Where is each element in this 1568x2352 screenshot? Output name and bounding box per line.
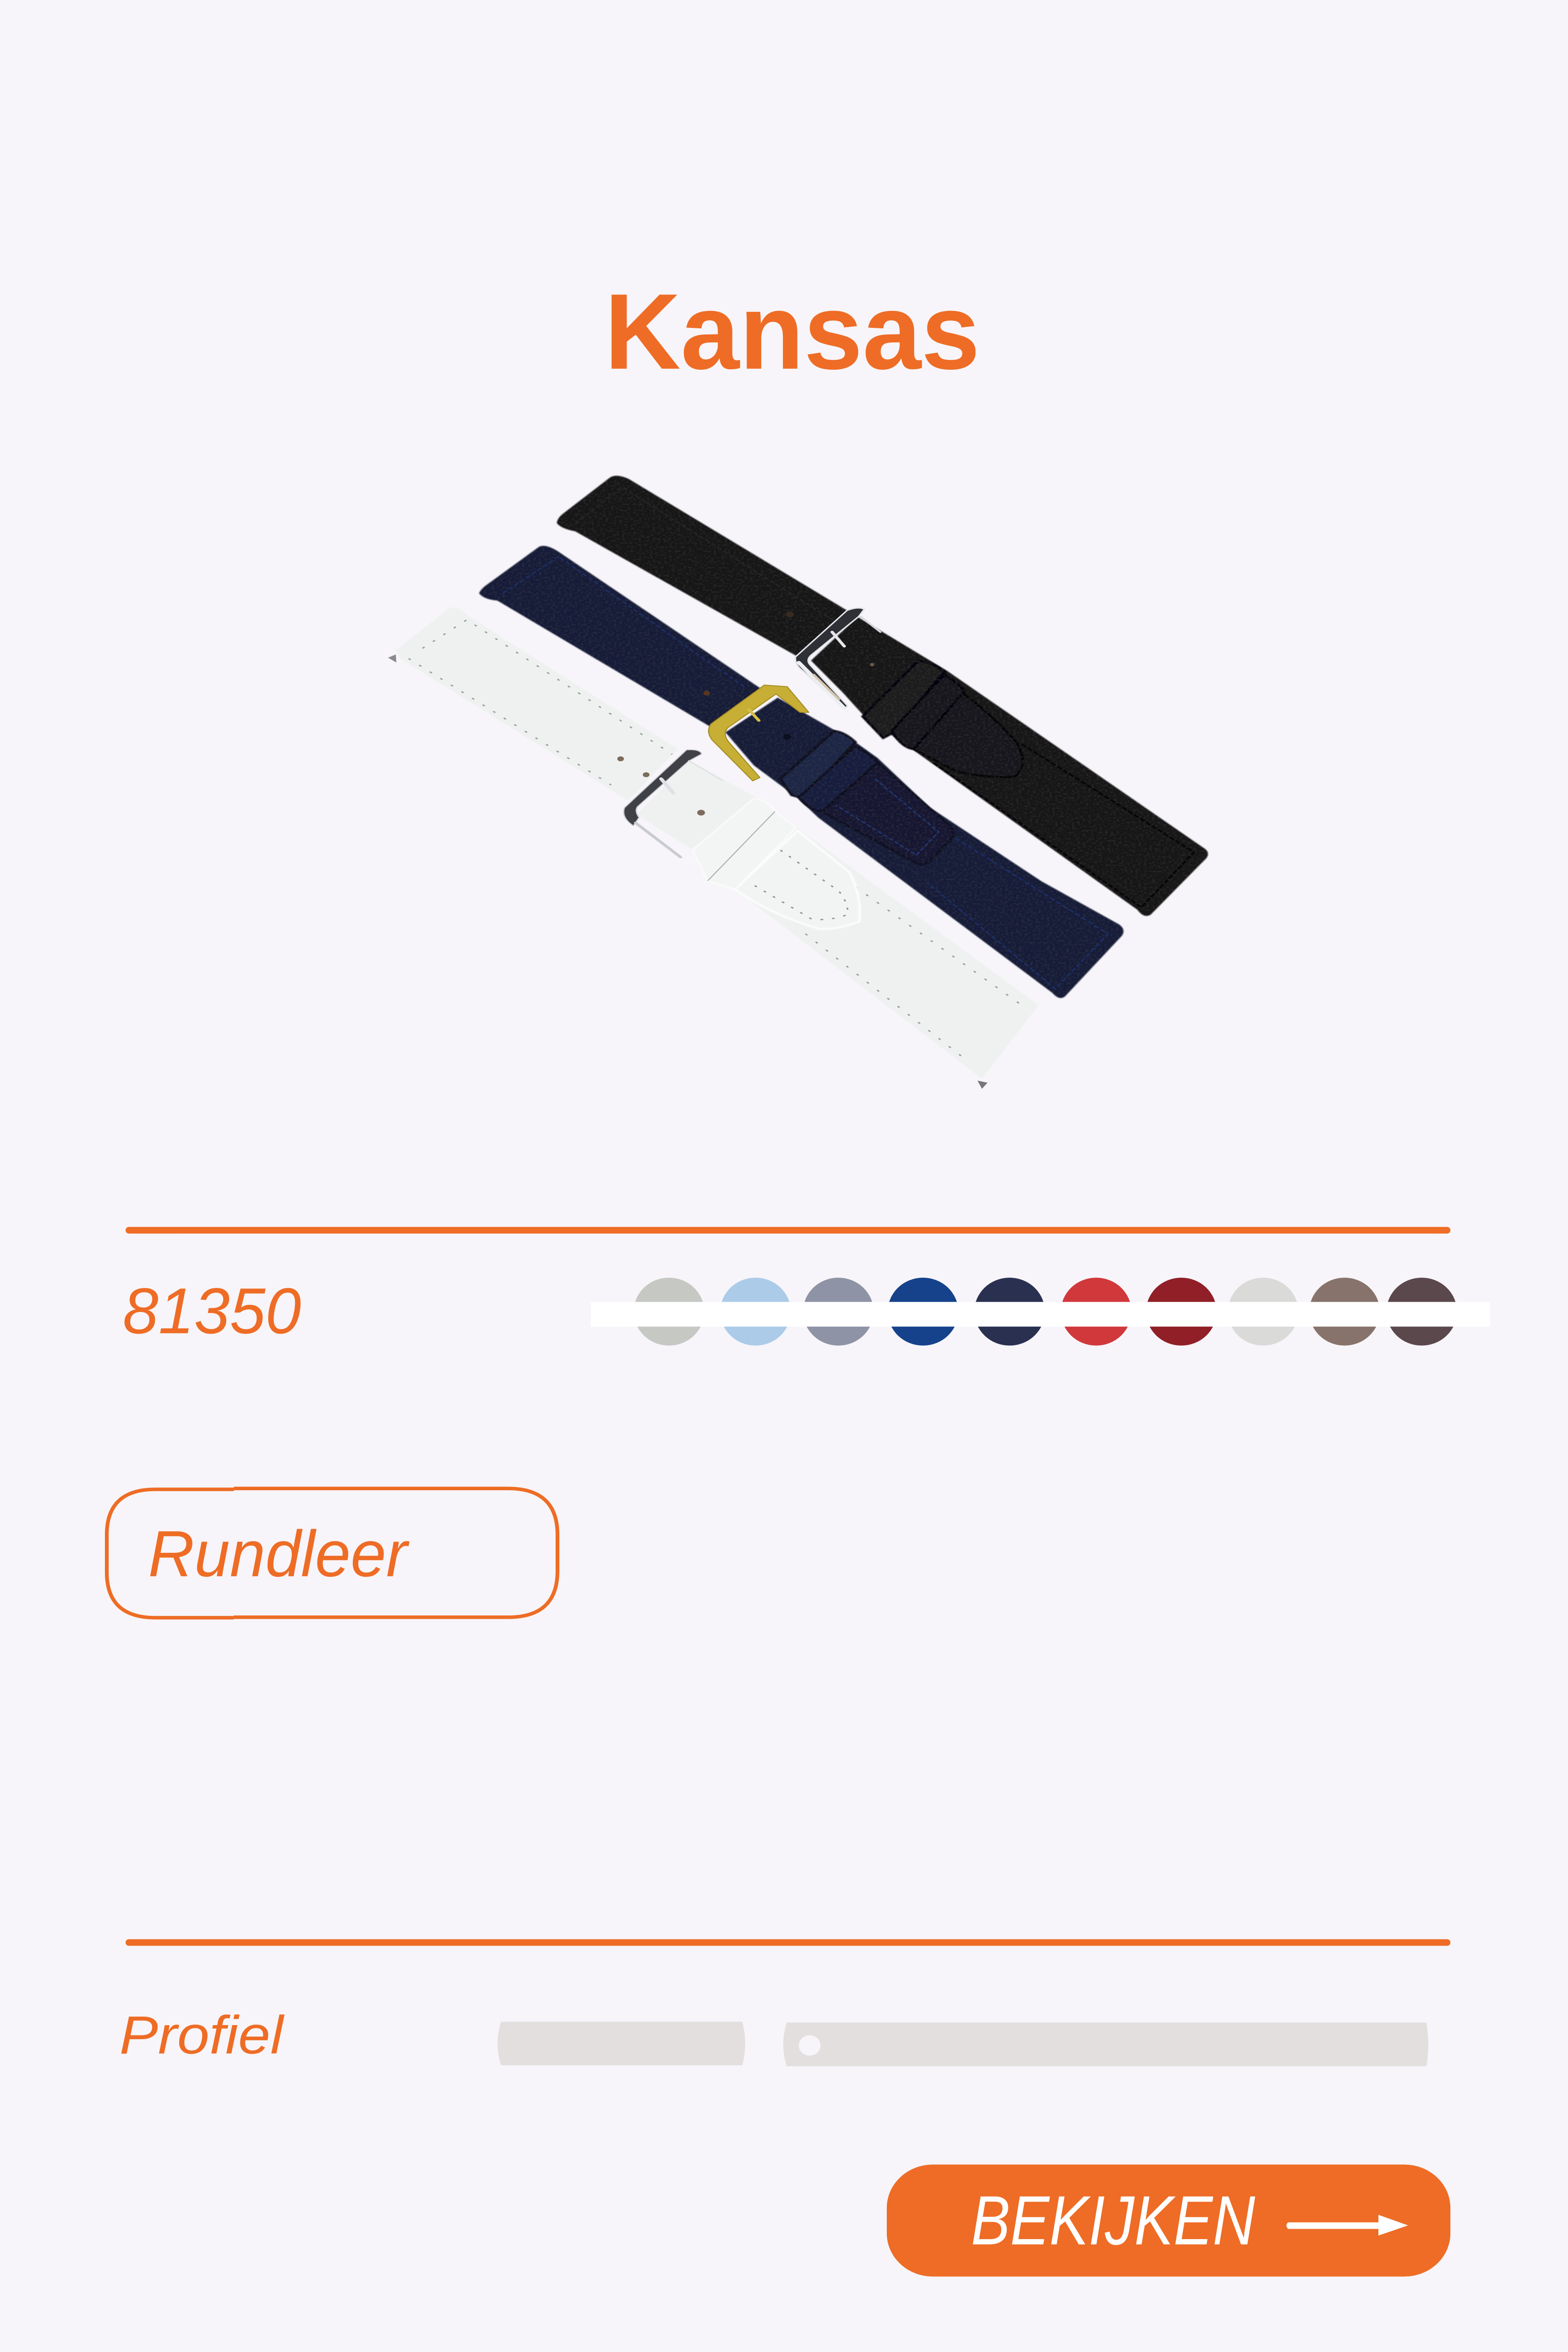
profile label: Profiel bbox=[119, 2005, 285, 2065]
icon: arrow bbox=[1286, 2215, 1408, 2235]
colour swatches bbox=[591, 1278, 1490, 1345]
divider: lower bbox=[126, 1939, 1450, 1946]
material label: Rundleer bbox=[148, 1518, 410, 1590]
button label: BEKIJKEN bbox=[971, 2182, 1255, 2259]
profile bar: short bbox=[498, 2022, 745, 2066]
profile bar: long with marker bbox=[783, 2023, 1428, 2066]
black tongue and keepers bbox=[863, 661, 1023, 777]
product photo: three leather watch straps bbox=[388, 476, 1208, 1089]
strap: navy bbox=[479, 546, 1123, 998]
strap: black bbox=[557, 476, 1208, 916]
button: bekijken bbox=[887, 2165, 1450, 2277]
strap: white bbox=[388, 607, 1039, 1089]
divider: upper bbox=[126, 1227, 1450, 1233]
material tag bbox=[107, 1488, 557, 1618]
title: Kansas bbox=[605, 272, 980, 392]
buckle: silver bbox=[796, 608, 880, 709]
white tongue and keeper bbox=[693, 798, 860, 929]
article number: 81350 bbox=[123, 1275, 301, 1347]
buckle: gold bbox=[708, 685, 809, 781]
buckle: white strap silver bbox=[624, 750, 723, 857]
navy tongue and keepers bbox=[780, 731, 954, 864]
